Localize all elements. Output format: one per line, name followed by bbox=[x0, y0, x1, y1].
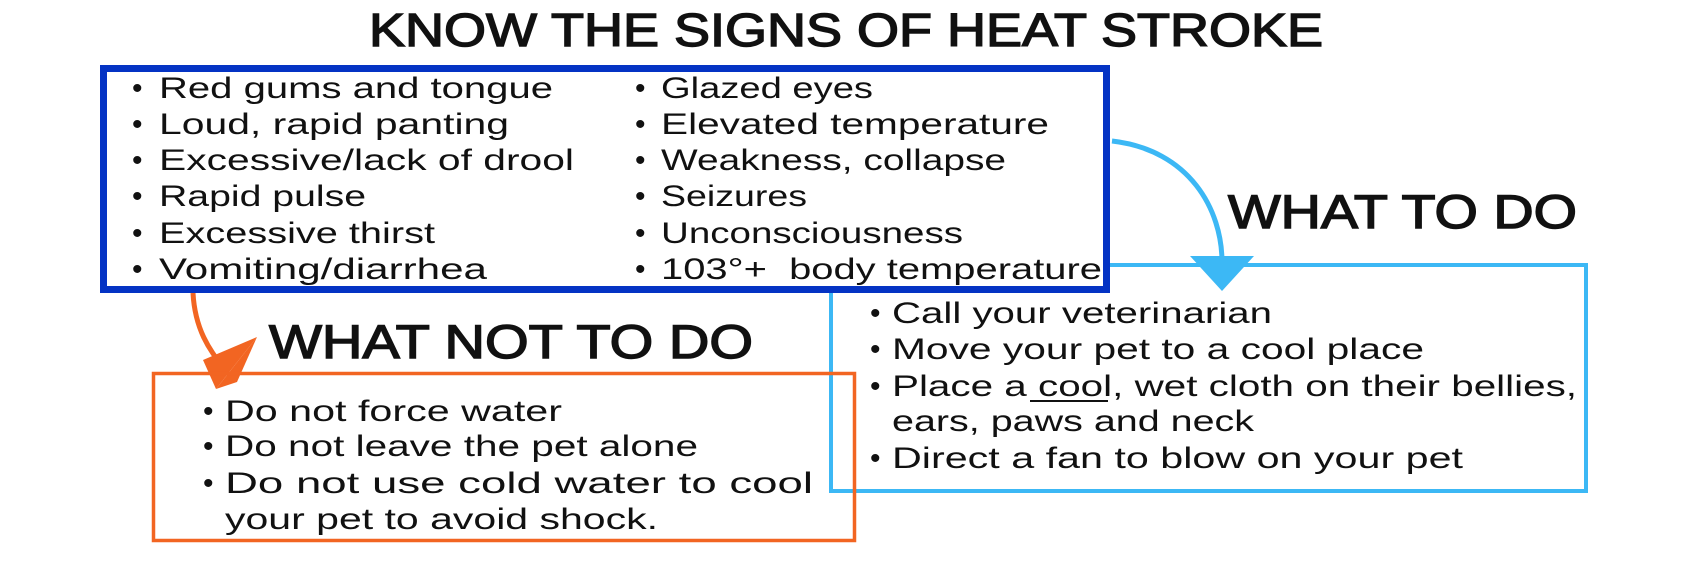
list: what not to do: • bbox=[203, 430, 214, 463]
list: signs column 1: • bbox=[132, 72, 143, 105]
list: signs column 1: Loud, rapid panting bbox=[159, 108, 509, 141]
list: what to do: Move your pet to a cool place bbox=[892, 333, 1424, 366]
arrow: to what to do bbox=[1112, 141, 1254, 291]
list: signs column 1 bbox=[132, 72, 574, 286]
heading: what to do: WHAT TO DO bbox=[1228, 185, 1577, 238]
list: what to do: • bbox=[870, 333, 881, 366]
list: what to do: • bbox=[870, 297, 881, 330]
list: signs column 2: • bbox=[635, 144, 646, 177]
list: what to do: Direct a fan to blow on your pet bbox=[892, 442, 1464, 475]
list: signs column 2 bbox=[635, 72, 1102, 286]
arrow: to what not to do bbox=[193, 293, 257, 389]
panel: what not to do bbox=[154, 374, 854, 540]
list: what to do: Call your veterinarian bbox=[892, 297, 1272, 330]
list: signs column 1: • bbox=[132, 253, 143, 286]
list: signs column 1: Excessive/lack of drool bbox=[159, 144, 574, 177]
list: what not to do: • bbox=[203, 395, 214, 428]
list: signs column 1: • bbox=[132, 180, 143, 213]
list: what not to do: Do not use cold water to cool bbox=[225, 467, 813, 500]
list: signs column 2: • bbox=[635, 217, 646, 250]
list: signs column 1: • bbox=[132, 108, 143, 141]
list: signs column 2: Unconsciousness bbox=[661, 217, 963, 250]
list: signs column 2: • bbox=[635, 72, 646, 105]
list: signs column 1: • bbox=[132, 217, 143, 250]
title: KNOW THE SIGNS OF HEAT STROKE bbox=[369, 4, 1323, 56]
panel: signs bbox=[104, 68, 1106, 290]
list: signs column 2: Elevated temperature bbox=[661, 108, 1049, 141]
list: signs column 2: • bbox=[635, 253, 646, 286]
list: signs column 1: Red gums and tongue bbox=[159, 72, 553, 105]
list: what not to do bbox=[203, 395, 813, 536]
list: signs column 1: Vomiting/diarrhea bbox=[159, 253, 487, 286]
panel: what to do bbox=[831, 265, 1586, 491]
list: what not to do: • bbox=[203, 467, 214, 500]
list: what to do: ears, paws and neck bbox=[892, 405, 1255, 438]
list: signs column 2: • bbox=[635, 108, 646, 141]
list: what not to do: your pet to avoid shock. bbox=[225, 503, 658, 536]
list: what to do bbox=[870, 297, 1577, 475]
list: what to do: • bbox=[870, 442, 881, 475]
list: what to do: Place a cool, wet cloth on their bellies, bbox=[892, 370, 1577, 403]
list: signs column 1: Rapid pulse bbox=[159, 180, 366, 213]
list: signs column 1: • bbox=[132, 144, 143, 177]
list: signs column 2: Glazed eyes bbox=[661, 72, 873, 105]
list: signs column 2: Weakness, collapse bbox=[661, 144, 1006, 177]
list: what to do: • bbox=[870, 370, 881, 403]
list: signs column 2: 103°+ body temperature bbox=[661, 253, 1102, 286]
list: signs column 1: Excessive thirst bbox=[159, 217, 436, 250]
list: what not to do: Do not leave the pet alone bbox=[225, 430, 698, 463]
list: signs column 2: • bbox=[635, 180, 646, 213]
list: signs column 2: Seizures bbox=[661, 180, 807, 213]
list: what not to do: Do not force water bbox=[225, 395, 562, 428]
heading: what not to do: WHAT NOT TO DO bbox=[269, 315, 753, 368]
